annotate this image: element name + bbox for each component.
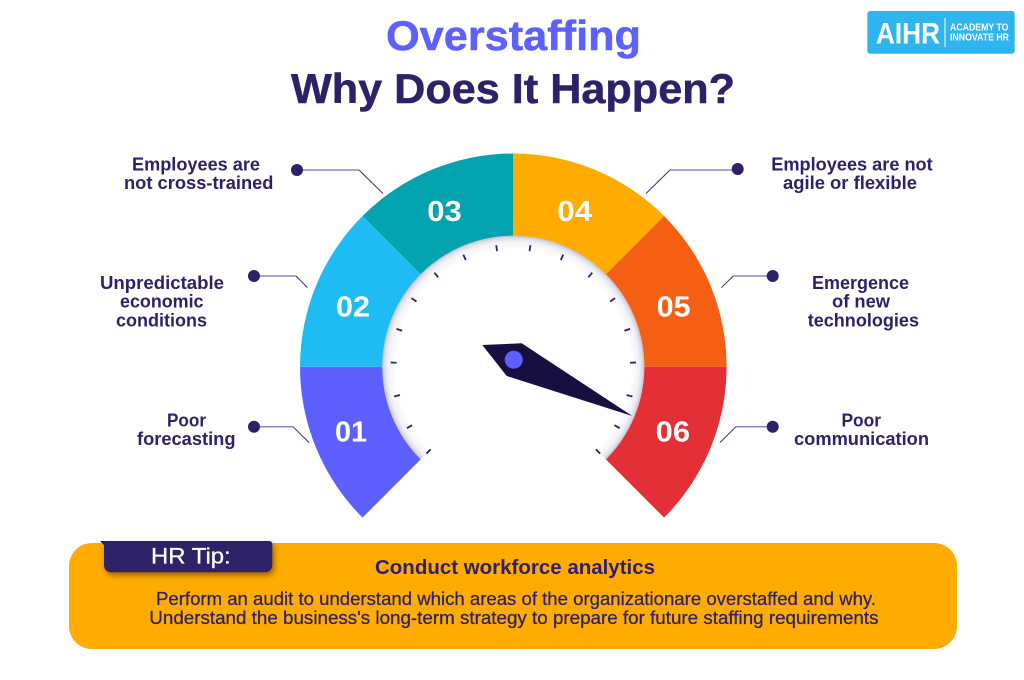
label: 02 Unpredictable economic conditions: conditions (116, 311, 207, 331)
segment 02 (300, 216, 421, 367)
dial ticks (391, 245, 636, 454)
segment 06 (606, 367, 727, 518)
label: 03 Employees are not cross-trained (124, 155, 383, 194)
badge: HR Tip (100, 541, 272, 572)
panel background (69, 543, 957, 649)
label: 01 Poor forecasting: forecasting (137, 429, 236, 449)
segment 01: 01 (335, 417, 367, 449)
label: 01 Poor forecasting: Poor (167, 411, 206, 431)
label: 03 Employees are not cross-trained: not cross-trained (124, 173, 274, 193)
segment 01 (300, 367, 421, 518)
label: 04 Employees are not agile or flexible (646, 155, 933, 194)
label: 05 Emergence of new technologies (721, 270, 919, 331)
title line: Why Does It Happen?: Why Does It Happen? (291, 65, 735, 112)
label: 06 Poor communication: communication (794, 429, 929, 449)
label: 04 Employees are not agile or flexible: agile or flexible (783, 173, 917, 193)
segment 05: 05 (657, 292, 691, 324)
label: 03 Employees are not cross-trained: Employees are (132, 155, 260, 175)
label: 05 Emergence of new technologies: technologies (808, 311, 919, 331)
title line: Overstaffing: Overstaffing (386, 12, 641, 59)
panel: HR tip (69, 541, 957, 649)
segment 04: 04 (557, 196, 592, 228)
segment 06: 06 (656, 417, 690, 449)
logo: AIHR: INNOVATE HR (950, 33, 1010, 44)
label: 05 Emergence of new technologies: Emergence (812, 273, 909, 293)
logo: AIHR: ACADEMY TO (950, 23, 1009, 34)
needle (482, 343, 632, 416)
title (291, 12, 735, 112)
label: 02 Unpredictable economic conditions: Unpredictable (100, 273, 224, 293)
segment 03 (362, 154, 513, 274)
tip heading: Conduct workforce analytics (375, 557, 655, 579)
tip body text (149, 589, 878, 628)
label: 02 Unpredictable economic conditions: economic (120, 292, 204, 312)
label: 06 Poor communication (720, 411, 929, 449)
tip body text: Understand the business's long-term strategy to prepare for future staffing requirements (149, 608, 878, 628)
label: 06 Poor communication: Poor (842, 411, 881, 431)
logo: AIHR (867, 11, 1015, 54)
label: 04 Employees are not agile or flexible: Employees are not (771, 155, 933, 175)
label: 01 Poor forecasting (137, 411, 309, 449)
label: 02 Unpredictable economic conditions (100, 270, 308, 331)
segment 04 (513, 154, 664, 274)
badge: HR Tip: HR Tip: (151, 543, 231, 568)
dial face (382, 236, 644, 459)
segment 02: 02 (336, 292, 370, 324)
gauge (300, 154, 727, 518)
segment 05 (606, 216, 727, 367)
label: 05 Emergence of new technologies: of new (832, 292, 891, 312)
segment 03: 03 (427, 196, 462, 228)
logo: AIHR: AIHR (876, 17, 940, 50)
tip body text: Perform an audit to understand which areas of the organizationare overstaffed and why. (156, 589, 876, 609)
